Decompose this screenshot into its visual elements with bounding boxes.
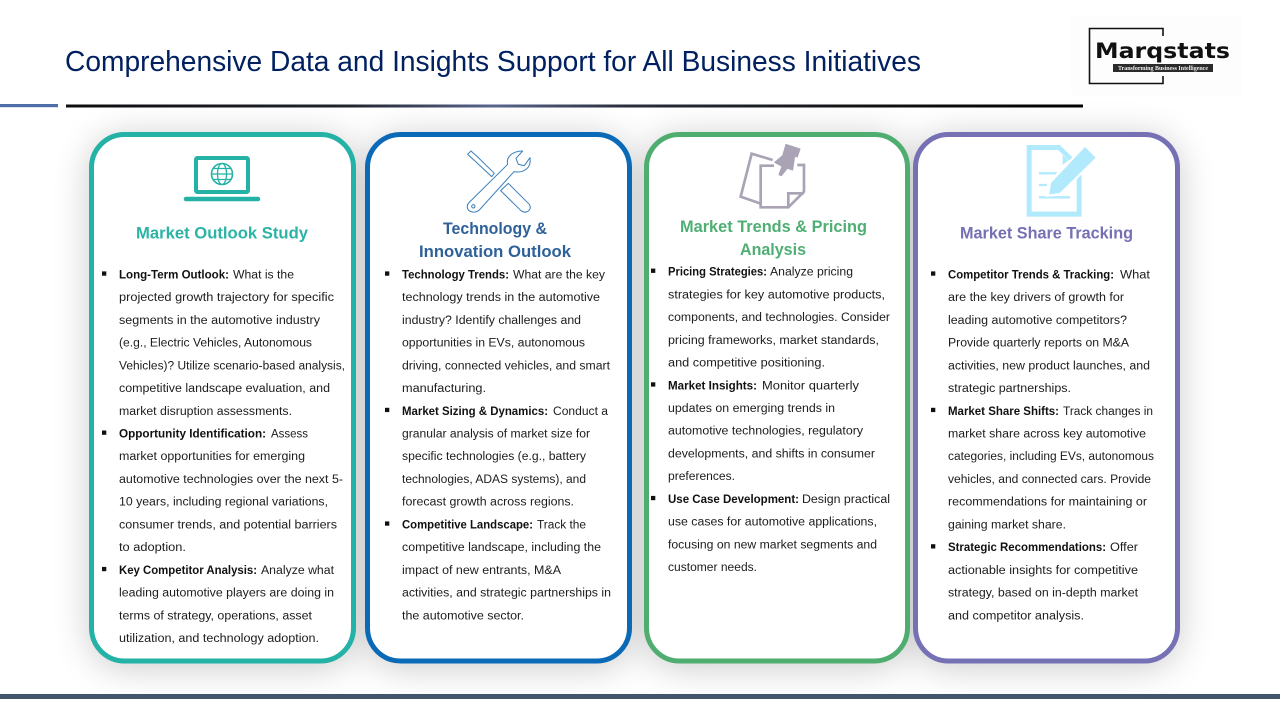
heading: Innovation Outlook	[419, 242, 572, 261]
bullet list: Monitor quarterly	[762, 380, 859, 392]
bullet list: Market Sizing & Dynamics:	[402, 406, 548, 418]
footer bar	[0, 694, 1280, 699]
panel: Market Share Tracking	[916, 134, 1178, 661]
bullet list: preferences.	[668, 471, 735, 483]
panel: Market Outlook Study	[92, 134, 354, 661]
bullet list: categories, including EVs, autonomous	[948, 451, 1154, 463]
bullet list: impact of new entrants, M&A	[402, 565, 561, 577]
bullet list: granular analysis of market size for	[402, 429, 590, 441]
bullet list: updates on emerging trends in	[668, 403, 835, 415]
bullet list: forecast growth across regions.	[402, 497, 574, 509]
bullet list: use cases for automotive applications,	[668, 517, 877, 529]
bullet list: actionable insights for competitive	[948, 565, 1138, 577]
bullet list: opportunities in EVs, autonomous	[402, 338, 585, 350]
bullet list: strategy, based on in-depth market	[948, 588, 1139, 600]
bullet list: projected growth trajectory for specific	[119, 292, 334, 304]
bullet list: Vehicles)? Utilize scenario-based analysis,	[119, 360, 345, 372]
bullet list: Market Share Shifts:	[948, 406, 1059, 418]
bullet list: strategic partnerships.	[948, 383, 1071, 395]
heading: Analysis	[740, 240, 806, 259]
bullet list	[651, 267, 890, 574]
icon: pinned notes	[741, 144, 804, 207]
heading: Market Outlook Study	[136, 224, 309, 242]
logo: Marqstats: Marqstats	[1095, 39, 1230, 63]
bullet list: competitive landscape, including the	[402, 542, 601, 554]
bullet list: What are the key	[513, 269, 605, 281]
bullet list: Use Case Development:	[668, 494, 799, 506]
icon: laptop with globe	[186, 158, 258, 199]
bullet list: activities, new product launches, and	[948, 360, 1150, 372]
bullet list: 10 years, including regional variations,	[119, 497, 328, 509]
bullet list: Strategic Recommendations:	[948, 542, 1106, 554]
bullet list: Competitive Landscape:	[402, 519, 533, 531]
bullet list: developments, and shifts in consumer	[668, 448, 875, 460]
bullet list: Technology Trends:	[402, 269, 509, 281]
bullet list: the automotive sector.	[402, 610, 524, 622]
logo: Marqstats: Transforming Business Intelligence	[1118, 66, 1208, 72]
bullet list: are the key drivers of growth for	[948, 292, 1124, 304]
bullet list: Conduct a	[553, 406, 609, 418]
bullet list: and competitive positioning.	[668, 357, 825, 369]
title: Comprehensive Data and Insights Support for All Business Initiatives	[65, 46, 921, 78]
bullet list: segments in the automotive industry	[119, 315, 320, 327]
heading	[680, 217, 867, 259]
bullet list	[931, 269, 1154, 622]
bullet list: to adoption.	[119, 542, 186, 554]
panel: Market Trends & Pricing Analysis	[646, 134, 908, 661]
bullet list: Provide quarterly reports on M&A	[948, 338, 1129, 350]
bullet list: Track changes in	[1063, 406, 1153, 418]
bullet list: pricing frameworks, market standards,	[668, 335, 879, 347]
bullet list	[102, 269, 345, 645]
title rule	[66, 104, 1083, 108]
heading: Market Trends & Pricing	[680, 217, 867, 236]
icon: crossed wrench and screwdriver	[467, 151, 530, 212]
bullet list: gaining market share.	[948, 519, 1066, 531]
bullet list: driving, connected vehicles, and smart	[402, 360, 611, 372]
bullet list: Opportunity Identification:	[119, 429, 266, 441]
bullet list: customer needs.	[668, 562, 757, 574]
bullet list: Pricing Strategies:	[668, 267, 767, 279]
bullet list: Competitor Trends & Tracking:	[948, 269, 1114, 281]
bullet list: market share across key automotive	[948, 429, 1146, 441]
bullet list: market disruption assessments.	[119, 406, 292, 418]
logo: Marqstats	[1071, 15, 1242, 95]
bullet list: consumer trends, and potential barriers	[119, 519, 337, 531]
bullet list: specific technologies (e.g., battery	[402, 451, 586, 463]
bullet list: Analyze pricing	[770, 267, 853, 279]
bullet list: market opportunities for emerging	[119, 451, 305, 463]
bullet list: Market Insights:	[668, 380, 757, 392]
bullet list: Offer	[1110, 542, 1138, 554]
bullet list: utilization, and technology adoption.	[119, 633, 319, 645]
heading: Market Share Tracking	[960, 224, 1133, 242]
panel: Technology & Innovation Outlook	[368, 134, 630, 661]
bullet list: activities, and strategic partnerships in	[402, 588, 611, 600]
bullet list: automotive technologies, regulatory	[668, 426, 863, 438]
bullet list: technology trends in the automotive	[402, 292, 600, 304]
title accent rule	[0, 104, 58, 107]
bullet list: industry? Identify challenges and	[402, 315, 581, 327]
bullet list: What	[1120, 269, 1151, 281]
bullet list: vehicles, and connected cars. Provide	[948, 474, 1151, 486]
bullet list: Design practical	[802, 494, 890, 506]
bullet list: automotive technologies over the next 5-	[119, 474, 343, 486]
bullet list: Assess	[271, 429, 308, 441]
bullet list: Key Competitor Analysis:	[119, 565, 257, 577]
bullet list: (e.g., Electric Vehicles, Autonomous	[119, 338, 312, 350]
bullet list: components, and technologies. Consider	[668, 312, 890, 324]
card shadows	[89, 136, 1180, 668]
bullet list: Track the	[537, 519, 586, 531]
bullet list: leading automotive competitors?	[948, 315, 1127, 327]
bullet list: technologies, ADAS systems), and	[402, 474, 586, 486]
bullet list: terms of strategy, operations, asset	[119, 610, 313, 622]
bullet list: recommendations for maintaining or	[948, 497, 1147, 509]
bullet list: manufacturing.	[402, 383, 486, 395]
bullet list: What is the	[233, 269, 294, 281]
heading	[419, 219, 572, 261]
bullet list: Long-Term Outlook:	[119, 269, 229, 281]
bullet list: competitive landscape evaluation, and	[119, 383, 330, 395]
bullet list: Analyze what	[261, 565, 335, 577]
bullet list: strategies for key automotive products,	[668, 289, 885, 301]
bullet list: leading automotive players are doing in	[119, 588, 334, 600]
bullet list	[385, 269, 611, 622]
heading: Technology &	[443, 219, 547, 238]
bullet list: and competitor analysis.	[948, 610, 1084, 622]
bullet list: focusing on new market segments and	[668, 539, 877, 551]
icon: document with pencil	[1027, 144, 1098, 217]
